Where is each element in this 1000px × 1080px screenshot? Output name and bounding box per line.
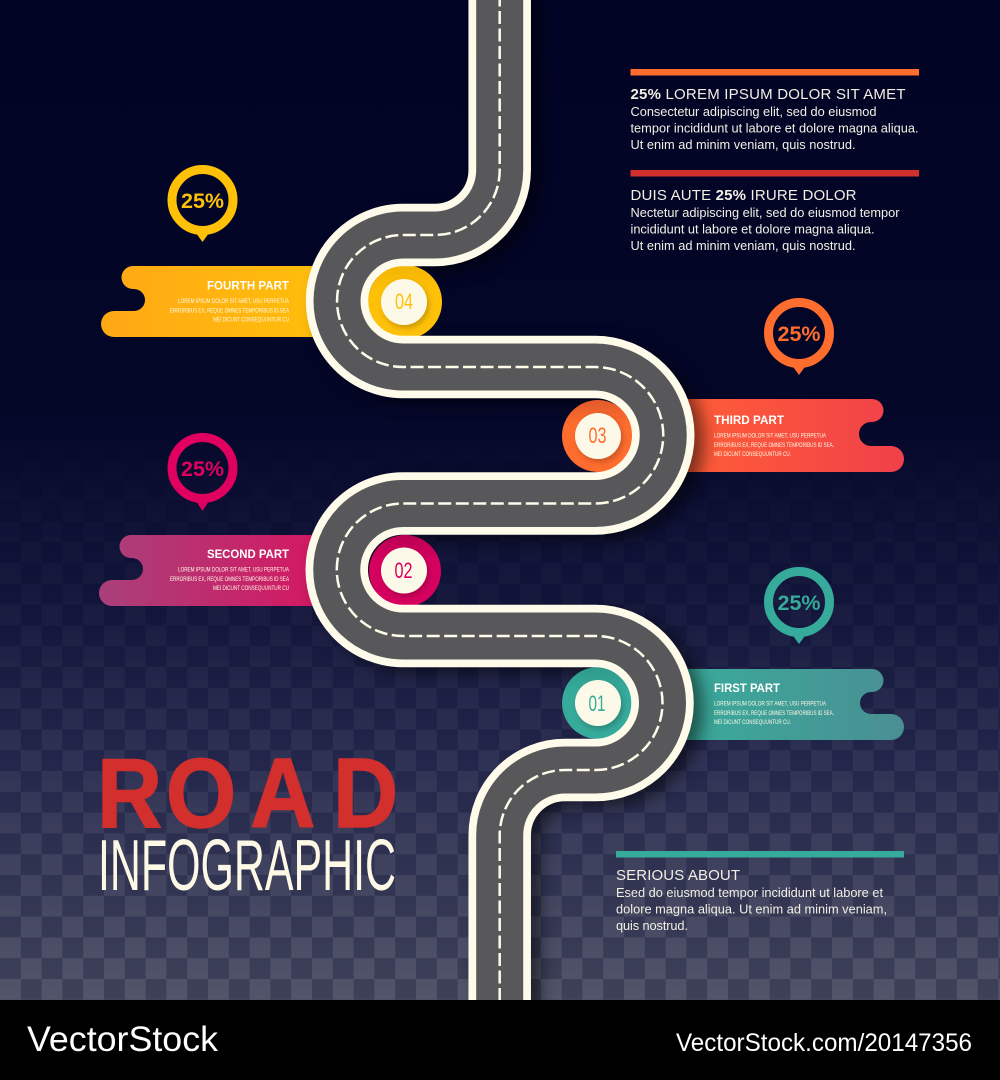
percent pin: second — [172, 438, 233, 511]
percent pin: first: 25% — [778, 592, 821, 615]
title — [97, 739, 398, 906]
text: first part — [714, 681, 834, 726]
text block: duis aute: Nectetur adipiscing elit, sed do eiusmod tempor — [630, 205, 900, 220]
text: first part: FIRST PART — [714, 681, 781, 695]
text: fourth part: ERRORIBUS EX, REQUE OMNES TEMPORIBUS ID SEA — [170, 308, 289, 314]
text block: serious about: Esed do eiusmod tempor incididunt ut labore et — [616, 885, 883, 900]
text: fourth part: MEI DICUNT CONSEQUUNTUR CU — [213, 316, 289, 324]
road — [337, 0, 663, 1010]
node 02: 02 — [394, 558, 412, 583]
panel: first part ribbon — [680, 669, 904, 740]
footer bar: VectorStock — [27, 1020, 219, 1059]
node disc 01 — [562, 667, 634, 739]
text: fourth part: FOURTH PART — [207, 278, 290, 292]
text block: duis aute: Ut enim ad minim veniam, quis nostrud. — [630, 238, 856, 253]
text: third part: LOREM IPSUM DOLOR SIT AMET, USU PERPETUA — [714, 432, 826, 440]
node 01: 01 — [588, 691, 606, 716]
footer bar — [0, 1000, 1000, 1080]
text: third part — [714, 413, 834, 458]
text: first part: LOREM IPSUM DOLOR SIT AMET, USU PERPETUA — [714, 700, 826, 708]
node 01 — [575, 680, 621, 726]
text block: lorem ipsum: Ut enim ad minim veniam, quis nostrud. — [630, 137, 856, 152]
node disc 04 — [368, 265, 442, 339]
node 03 — [575, 413, 621, 459]
text: second part — [170, 547, 290, 592]
text block: serious about: quis nostrud. — [616, 918, 688, 933]
percent pin: fourth: 25% — [181, 190, 224, 213]
panel: third part ribbon — [680, 399, 904, 472]
title: ROAD — [97, 739, 398, 848]
percent pin: third: 25% — [778, 323, 821, 346]
road shadow — [347, 0, 673, 1016]
text block: serious about — [616, 851, 904, 933]
text block: lorem ipsum: 25% LOREM IPSUM DOLOR SIT AMET — [630, 86, 906, 103]
node 04: 04 — [395, 289, 413, 314]
text block: serious about: SERIOUS ABOUT — [616, 867, 740, 884]
text block: duis aute — [630, 170, 919, 253]
node 02 — [381, 548, 427, 594]
text block: duis aute: incididunt ut labore et dolore magna aliqua. — [630, 222, 874, 236]
node 03: 03 — [588, 423, 606, 448]
text: fourth part: LOREM IPSUM DOLOR SIT AMET, USU PERPETUA — [178, 298, 289, 305]
percent pin: fourth — [172, 170, 233, 242]
text: second part: ERRORIBUS EX, REQUE OMNES TEMPORIBUS ID SEA — [170, 576, 289, 583]
text: first part: ERRORIBUS EX, REQUE OMNES TEMPORIBUS ID SEA. — [714, 710, 834, 717]
text: fourth part — [170, 278, 290, 324]
node disc 02 — [369, 535, 441, 607]
node 04 — [381, 279, 427, 325]
text block: serious about: dolore magna aliqua. Ut enim ad minim veniam, — [616, 902, 887, 916]
panel: fourth part ribbon — [101, 266, 320, 337]
node disc 03 — [562, 400, 634, 472]
text block: lorem ipsum: tempor incididunt ut labore et dolore magna aliqua. — [630, 120, 918, 136]
panel: second part ribbon — [99, 535, 320, 606]
text: third part: ERRORIBUS EX, REQUE OMNES TEMPORIBUS ID SEA. — [714, 442, 834, 449]
text: first part: MEI DICUNT CONSEQUUNTUR CU. — [714, 719, 791, 726]
text: second part: MEI DICUNT CONSEQUUNTUR CU — [213, 585, 289, 592]
text block: lorem ipsum: Consectetur adipiscing elit, sed do eiusmod — [630, 104, 876, 119]
text: second part: SECOND PART — [207, 547, 290, 561]
title: INFOGRAPHIC — [98, 826, 396, 906]
percent pin: second: 25% — [181, 458, 224, 481]
footer bar: VectorStock.com/20147356 — [676, 1029, 972, 1057]
text: third part: MEI DICUNT CONSEQUUNTUR CU. — [714, 451, 791, 458]
text block: lorem ipsum — [630, 69, 919, 152]
text: third part: THIRD PART — [714, 413, 785, 427]
text block: duis aute: DUIS AUTE 25% IRURE DOLOR — [630, 187, 857, 204]
text: second part: LOREM IPSUM DOLOR SIT AMET, USU PERPETUA — [178, 566, 289, 574]
percent pin: first — [768, 572, 830, 644]
percent pin: third — [768, 302, 830, 375]
